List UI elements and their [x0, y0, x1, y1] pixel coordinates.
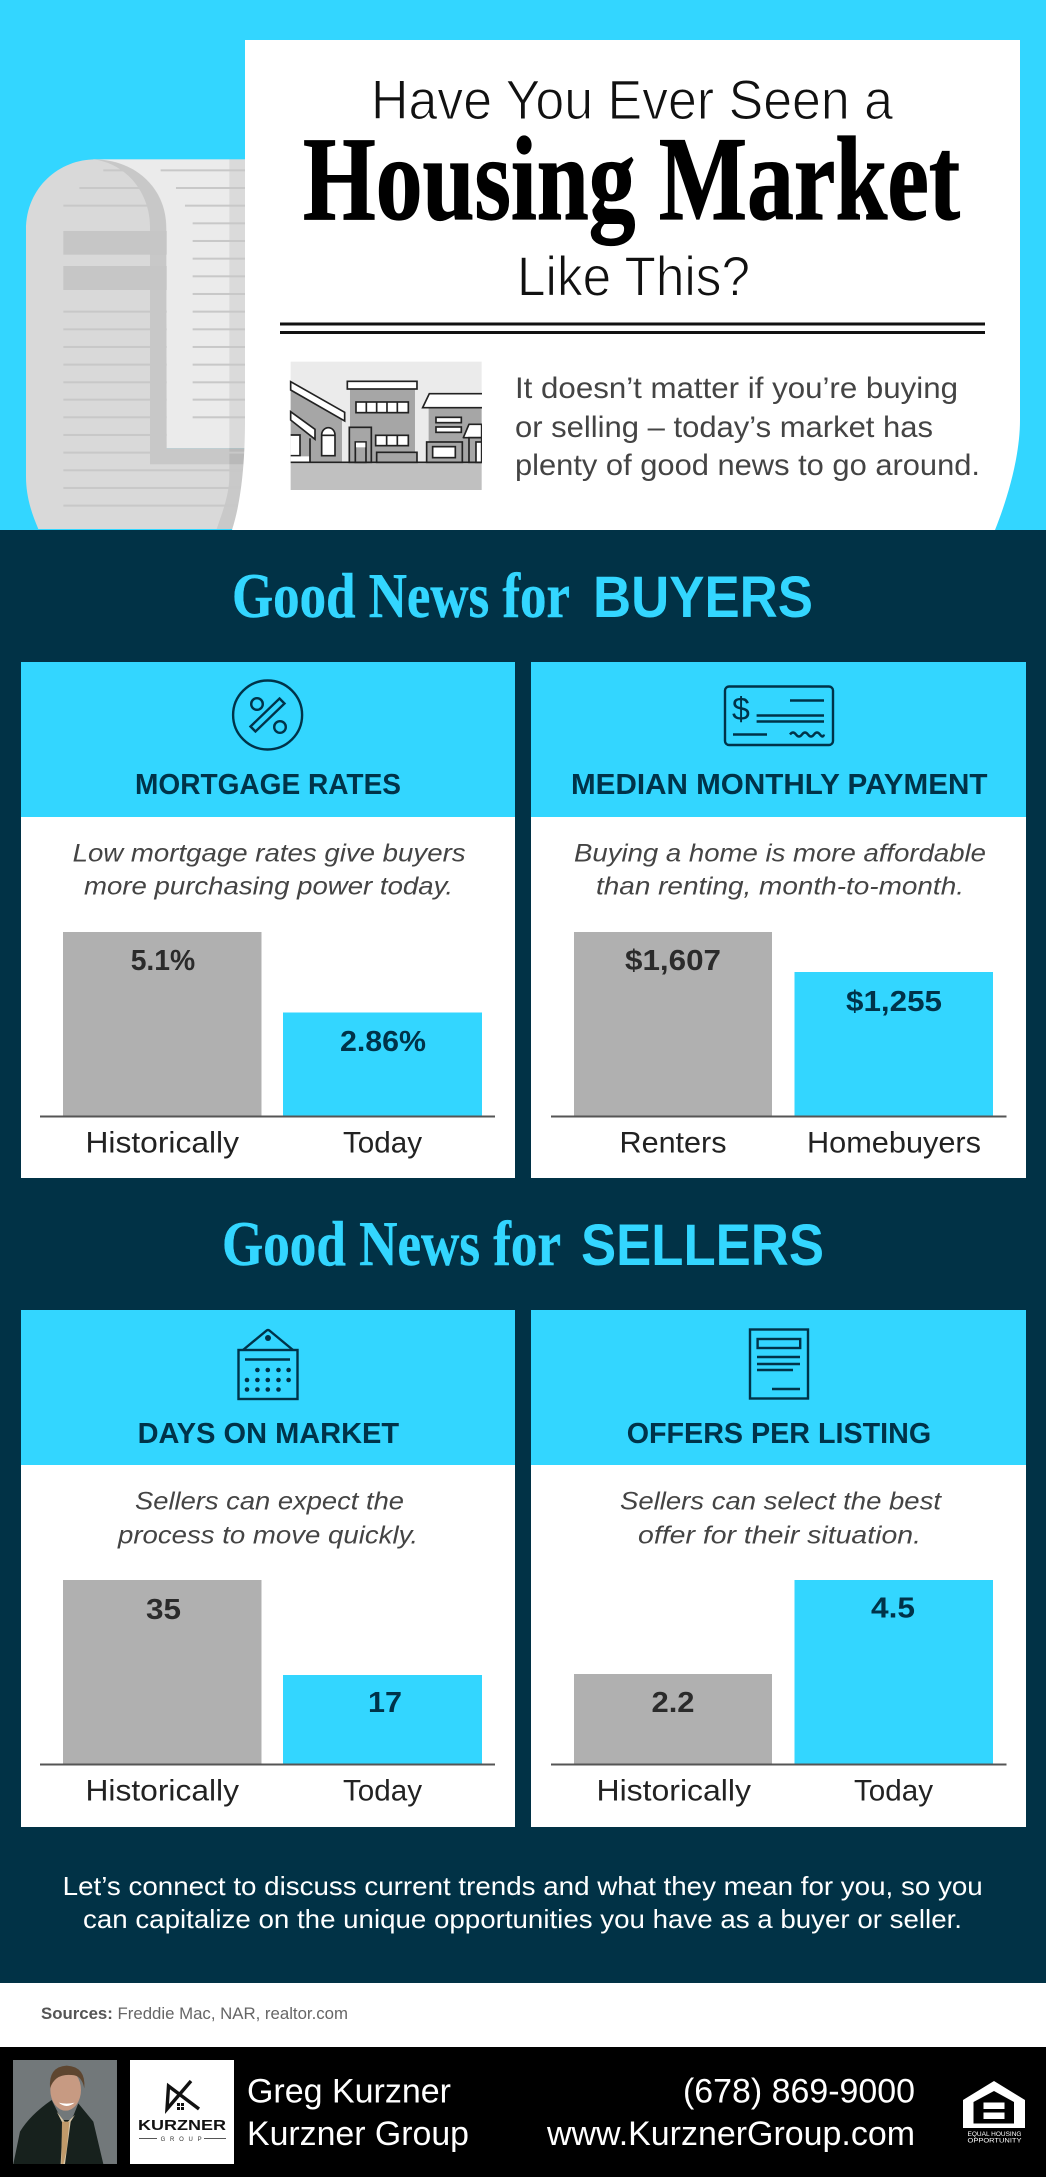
agent photo	[13, 2060, 117, 2164]
description: Low mortgage rates give buyers	[73, 840, 466, 868]
icon: check	[725, 686, 833, 745]
panel: days on market	[21, 1310, 515, 1827]
heading: good news for sellers: SELLERS	[581, 1213, 824, 1278]
footer bar	[0, 2047, 1046, 2177]
heading: offers per listing: OFFERS PER LISTING	[627, 1418, 931, 1450]
bar chart: median monthly payment: $1,607	[625, 945, 721, 977]
heading: good news for buyers: Good News for	[232, 560, 570, 631]
illustration: rolled newspaper	[26, 159, 247, 529]
sources text: Sources: Freddie Mac, NAR, realtor.com	[41, 2004, 348, 2023]
intro text	[515, 372, 980, 482]
description: Sellers can select the best	[620, 1488, 942, 1516]
description: than renting, month-to-month.	[596, 872, 964, 900]
illustration: street of houses	[291, 360, 485, 492]
panel: mortgage rates	[21, 662, 515, 1178]
heading: days on market: DAYS ON MARKET	[138, 1418, 399, 1450]
bar chart: offers per listing: 4.5	[871, 1592, 915, 1624]
panel: median monthly payment	[531, 662, 1026, 1178]
description: process to move quickly.	[117, 1522, 418, 1550]
logo: Kurzner Group: GROUP	[161, 2137, 202, 2143]
description: more purchasing power today.	[84, 872, 453, 900]
bar chart: days on market	[40, 1580, 495, 1808]
bar chart: mortgage rates: 5.1%	[131, 945, 195, 977]
icon: document	[750, 1330, 808, 1398]
intro text: It doesn’t matter if you’re buying	[515, 372, 958, 405]
description	[574, 840, 986, 900]
bar chart: days on market: Today	[343, 1774, 422, 1808]
logo: Kurzner Group: KURZNER	[138, 2117, 226, 2134]
closing message	[63, 1871, 983, 1934]
title: Have You Ever Seen a	[371, 68, 894, 131]
contact details	[546, 2073, 915, 2153]
description	[620, 1488, 942, 1550]
bar chart: days on market: 35	[146, 1594, 181, 1626]
agent name	[247, 2073, 469, 2153]
panel: newspaper page	[232, 40, 1020, 530]
bar chart: median monthly payment: $1,255	[846, 986, 942, 1018]
bar chart: mortgage rates: Historically	[86, 1126, 239, 1160]
logo mark	[167, 2081, 199, 2109]
heading: good news for sellers	[222, 1208, 824, 1279]
description: offer for their situation.	[638, 1522, 921, 1550]
bar chart: offers per listing	[551, 1580, 1006, 1808]
bar chart: days on market: Historically	[86, 1774, 239, 1808]
bar chart: offers per listing: Today	[854, 1774, 933, 1808]
contact details: www.KurznerGroup.com	[546, 2115, 915, 2153]
heading: good news for sellers: Good News for	[222, 1208, 561, 1279]
heading: good news for buyers: BUYERS	[593, 565, 813, 630]
description	[117, 1488, 418, 1550]
bar chart: offers per listing: 2.2	[652, 1687, 694, 1719]
logo: Kurzner Group	[130, 2060, 234, 2164]
icon: calendar	[238, 1330, 298, 1399]
heading: mortgage rates: MORTGAGE RATES	[135, 769, 401, 801]
description: Buying a home is more affordable	[574, 840, 986, 868]
closing message: can capitalize on the unique opportunities you have as a buyer or seller.	[83, 1904, 962, 1934]
contact details: (678) 869-9000	[683, 2073, 915, 2111]
agent name: Greg Kurzner	[247, 2073, 451, 2111]
sources strip	[0, 1983, 1046, 2047]
icon: equal housing opportunity: OPPORTUNITY	[968, 2138, 1022, 2144]
hero background	[0, 0, 1046, 530]
heading: median monthly payment: MEDIAN MONTHLY PAYMENT	[571, 769, 988, 801]
dark background panel	[0, 530, 1046, 1983]
bar chart: days on market: 17	[368, 1687, 402, 1719]
closing message: Let’s connect to discuss current trends and what they mean for you, so you	[63, 1871, 983, 1901]
icon: equal housing opportunity	[963, 2081, 1025, 2144]
description	[73, 840, 466, 900]
bar chart: median monthly payment: Homebuyers	[807, 1126, 981, 1160]
title rule	[280, 322, 985, 334]
bar chart: median monthly payment: Renters	[620, 1126, 726, 1160]
description: Sellers can expect the	[135, 1488, 404, 1516]
bar chart: mortgage rates: Today	[343, 1126, 422, 1160]
icon: check: $	[732, 691, 750, 727]
panel: offers per listing	[531, 1310, 1026, 1827]
icon: equal housing opportunity: EQUAL HOUSING	[968, 2131, 1022, 2138]
agent name: Kurzner Group	[247, 2115, 469, 2153]
bar chart: mortgage rates: 2.86%	[340, 1026, 426, 1058]
title: Like This?	[517, 244, 750, 308]
bar chart: offers per listing: Historically	[596, 1774, 751, 1808]
bar chart: mortgage rates	[40, 932, 495, 1160]
intro text: or selling – today’s market has	[515, 411, 933, 444]
bar chart: median monthly payment	[551, 932, 1006, 1160]
intro text: plenty of good news to go around.	[515, 449, 980, 482]
icon: percent	[233, 680, 302, 750]
title	[303, 68, 960, 308]
